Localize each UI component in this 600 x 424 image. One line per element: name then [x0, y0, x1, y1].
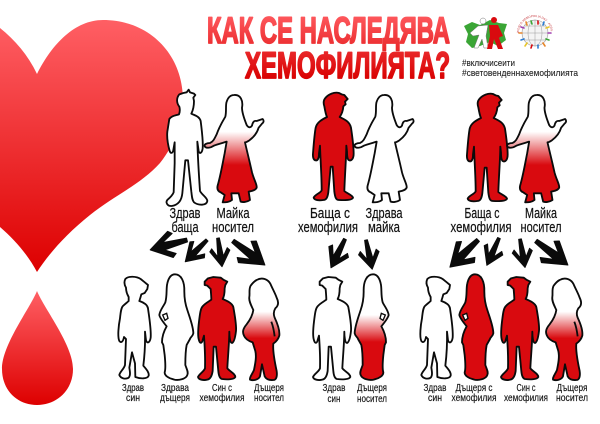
label: carrier mother: носител — [520, 220, 562, 236]
figure: son with hemophilia — [198, 277, 236, 380]
labels: children: Дъщеря — [254, 382, 284, 394]
labels: children: син — [328, 393, 341, 405]
label: father with hemophilia: Баща с — [310, 206, 350, 222]
hashtags — [462, 58, 579, 79]
labels: children — [122, 382, 284, 404]
blood drop — [2, 291, 73, 405]
labels: children: хемофилия — [200, 392, 244, 404]
figure: healthy son — [420, 277, 453, 379]
labels: children: носител — [254, 392, 284, 404]
label: carrier mother: Майка — [525, 206, 558, 222]
label: healthy mother: Здрава — [366, 206, 403, 222]
label: father with hemophilia: хемофилия — [450, 220, 512, 236]
hashtags: #световенденнахемофилията — [462, 68, 579, 79]
figure: father with hemophilia — [313, 93, 354, 200]
figure: carrier daughter — [355, 274, 389, 380]
label: carrier mother — [520, 206, 562, 236]
label: healthy mother — [366, 206, 403, 236]
label: healthy father — [170, 206, 201, 236]
labels: children: Здрав — [424, 382, 447, 394]
figure: carrier daughter — [546, 279, 582, 380]
label: father with hemophilia — [450, 206, 512, 236]
labels: children: Здрав — [322, 382, 346, 394]
labels: children: хемофилия — [452, 392, 496, 404]
label: father with hemophilia: хемофилия — [298, 220, 358, 236]
title — [207, 10, 450, 86]
hashtags: #включисеити — [462, 58, 515, 69]
title: КАК СЕ НАСЛЕДЯВА — [207, 10, 450, 51]
label: healthy father: Здрав — [170, 206, 201, 222]
logo: hemophilia society — [464, 17, 507, 49]
figure: healthy son — [313, 277, 351, 380]
figure: healthy father — [167, 90, 207, 206]
figure: carrier mother — [205, 95, 264, 202]
figure: carrier daughter — [243, 279, 279, 380]
family 1: healthy father, carrier mother — [118, 90, 284, 404]
labels: children: дъщеря — [160, 392, 190, 404]
labels: children: Син с — [212, 382, 232, 394]
family 2: father with hemophilia, healthy mother — [298, 93, 414, 405]
labels: children: носител — [357, 393, 387, 405]
figure: healthy daughter — [159, 274, 193, 380]
labels: children — [424, 382, 588, 404]
arrows — [321, 234, 383, 273]
label: father with hemophilia: Баща с — [464, 206, 500, 222]
figure: father with hemophilia — [467, 94, 508, 201]
figure: carrier mother — [507, 95, 566, 202]
label: carrier mother: Майка — [216, 206, 250, 222]
labels: children — [322, 382, 387, 405]
labels: children: Син с — [516, 382, 536, 394]
labels: children: Дъщеря — [357, 382, 387, 394]
label: carrier mother — [212, 206, 254, 236]
label: healthy mother: майка — [368, 220, 401, 236]
labels: children: Дъщеря с — [456, 382, 492, 394]
figure: healthy son — [118, 277, 151, 379]
labels: children: син — [126, 392, 140, 404]
label: carrier mother: носител — [212, 220, 254, 236]
figure: healthy mother — [355, 95, 414, 202]
figure: daughter with hemophilia — [459, 274, 493, 380]
title: ХЕМОФИЛИЯТА? — [245, 45, 450, 86]
family 3: father with hemophilia, carrier mother — [420, 94, 588, 404]
arrows — [440, 230, 576, 277]
labels: children: хемофилия — [504, 392, 548, 404]
labels: children: носител — [556, 392, 588, 404]
logo: world hemophilia day globe — [516, 15, 553, 49]
figure: son with hemophilia — [501, 277, 539, 380]
labels: children: Здрава — [161, 382, 189, 394]
heart — [0, 20, 183, 272]
labels: children: син — [428, 392, 442, 404]
label: healthy father: баща — [172, 220, 199, 236]
labels: children: Здрав — [122, 382, 144, 394]
label: father with hemophilia — [298, 206, 358, 236]
labels: children: Дъщеря — [556, 382, 588, 394]
arrows — [147, 227, 273, 276]
